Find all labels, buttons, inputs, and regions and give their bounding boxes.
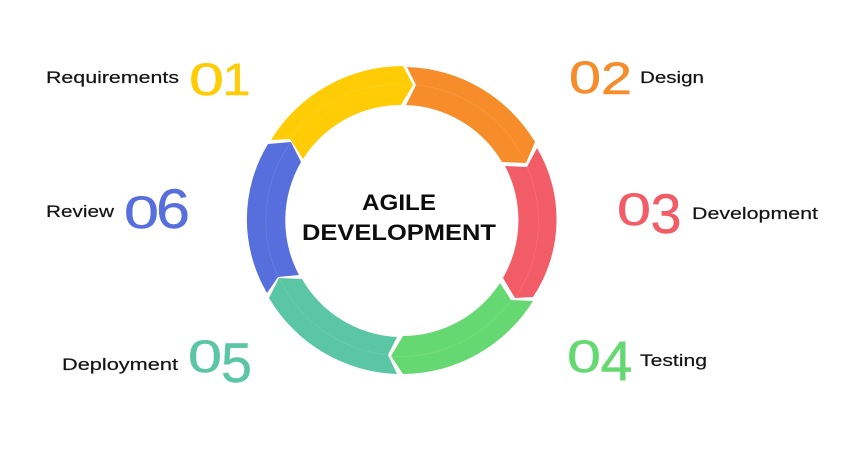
number 03: 0 (617, 184, 651, 235)
segment: teal deployment arrow (269, 278, 397, 374)
label: development: Development (692, 204, 818, 223)
label: design: Design (640, 68, 704, 87)
number 02: 2 (601, 53, 632, 104)
number 02 (569, 52, 632, 104)
segment: orange design arrow (406, 67, 535, 163)
number 03 (617, 182, 682, 245)
number 05: 0 (188, 331, 222, 382)
label: testing: Testing (640, 351, 707, 370)
number 04 (567, 329, 632, 392)
segment: yellow requirements arrow (271, 66, 413, 159)
number 01: 1 (222, 54, 250, 105)
center title: DEVELOPMENT (302, 220, 497, 245)
label: review: Review (46, 202, 115, 221)
cycle ring (247, 66, 557, 374)
number 06: 0 (124, 187, 159, 238)
number 06: 6 (156, 177, 190, 240)
number 01: 0 (189, 54, 224, 105)
segment: red development arrow (503, 148, 557, 298)
label: deployment: Deployment (62, 355, 178, 374)
number 04: 0 (567, 331, 601, 382)
segment: green testing arrow (391, 283, 533, 374)
number 05: 5 (221, 331, 252, 394)
segment: blue review arrow (247, 142, 301, 293)
number 03: 3 (650, 182, 682, 245)
label: requirements: Requirements (46, 68, 179, 87)
number 04: 4 (600, 329, 632, 392)
center title: AGILE (362, 190, 436, 215)
number 02: 0 (569, 52, 601, 103)
number 01 (189, 54, 250, 105)
center title (302, 190, 497, 245)
number 05 (188, 331, 252, 394)
number 06 (124, 177, 190, 240)
